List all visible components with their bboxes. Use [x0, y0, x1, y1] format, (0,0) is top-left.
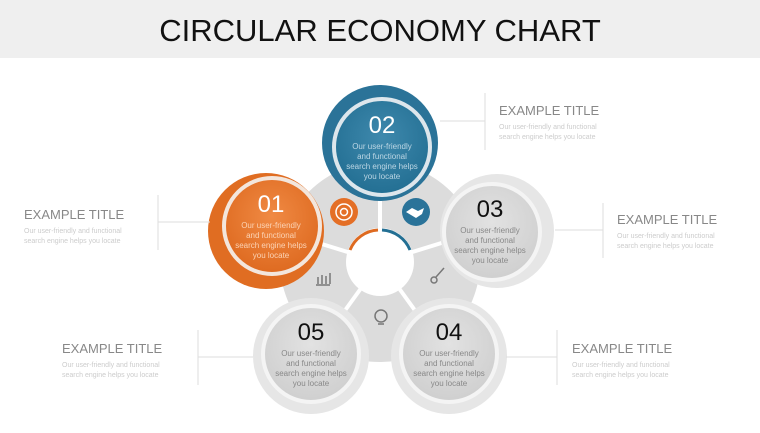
title: CIRCULAR ECONOMY CHART [159, 13, 601, 48]
circle 04 [391, 298, 507, 414]
circle 04: Our user-friendly [419, 349, 479, 358]
circle 04: and functional [424, 359, 474, 368]
text block: 02: EXAMPLE TITLE [499, 103, 600, 118]
text block: 03: search engine helps you locate [617, 243, 714, 250]
circle 01: Our user-friendly [241, 221, 301, 230]
icon: chart [316, 273, 330, 285]
circle 02: Our user-friendly [352, 142, 412, 151]
text block: left 01 [24, 207, 125, 245]
icon: tool [431, 268, 444, 283]
center ring [280, 160, 480, 362]
circle 03: you locate [472, 256, 509, 265]
circle 02: search engine helps [346, 162, 418, 171]
circle 03: search engine helps [454, 246, 526, 255]
circle 05 [253, 298, 369, 414]
circle 01: and functional [246, 231, 296, 240]
icon: bulb [375, 310, 387, 324]
circle 04: 04 [436, 319, 462, 346]
circle 03: Our user-friendly [460, 226, 520, 235]
circle 05: search engine helps [275, 369, 347, 378]
text block: 05 [62, 341, 163, 379]
text block: 04: Our user-friendly and functional [572, 362, 670, 369]
header band [0, 0, 760, 58]
circle 02: and functional [357, 152, 407, 161]
icon: handshake [402, 198, 430, 226]
circle 05: 05 [298, 319, 324, 346]
circle 02 [322, 85, 438, 201]
text block: 05: search engine helps you locate [62, 372, 159, 379]
text block: left 01: search engine helps you locate [24, 238, 121, 245]
circle 02: you locate [364, 172, 401, 181]
text block: 04 [572, 341, 673, 379]
text block: 05: Our user-friendly and functional [62, 362, 160, 369]
text block: left 01: EXAMPLE TITLE [24, 207, 125, 222]
circle 01 [208, 173, 324, 289]
text block: 03: Our user-friendly and functional [617, 233, 715, 240]
circle 05: and functional [286, 359, 336, 368]
circle 05: you locate [293, 379, 330, 388]
icon: target [330, 198, 358, 226]
circle 03: and functional [465, 236, 515, 245]
text block: 03: EXAMPLE TITLE [617, 212, 718, 227]
text block: 05: EXAMPLE TITLE [62, 341, 163, 356]
text block: 02: search engine helps you locate [499, 134, 596, 141]
circle 05: Our user-friendly [281, 349, 341, 358]
text block: 02 [499, 103, 600, 141]
text block: 03 [617, 212, 718, 250]
text block: 02: Our user-friendly and functional [499, 124, 597, 131]
circle 01: 01 [258, 191, 284, 218]
circle 04: search engine helps [413, 369, 485, 378]
circle 01: you locate [253, 251, 290, 260]
connector lines [158, 93, 603, 385]
circle 01: search engine helps [235, 241, 307, 250]
text block: left 01: Our user-friendly and functional [24, 228, 122, 235]
text block: 04: search engine helps you locate [572, 372, 669, 379]
circle 04: you locate [431, 379, 468, 388]
circle 03: 03 [477, 196, 503, 223]
circle 02: 02 [369, 112, 395, 139]
circle 03 [440, 174, 554, 288]
text block: 04: EXAMPLE TITLE [572, 341, 673, 356]
